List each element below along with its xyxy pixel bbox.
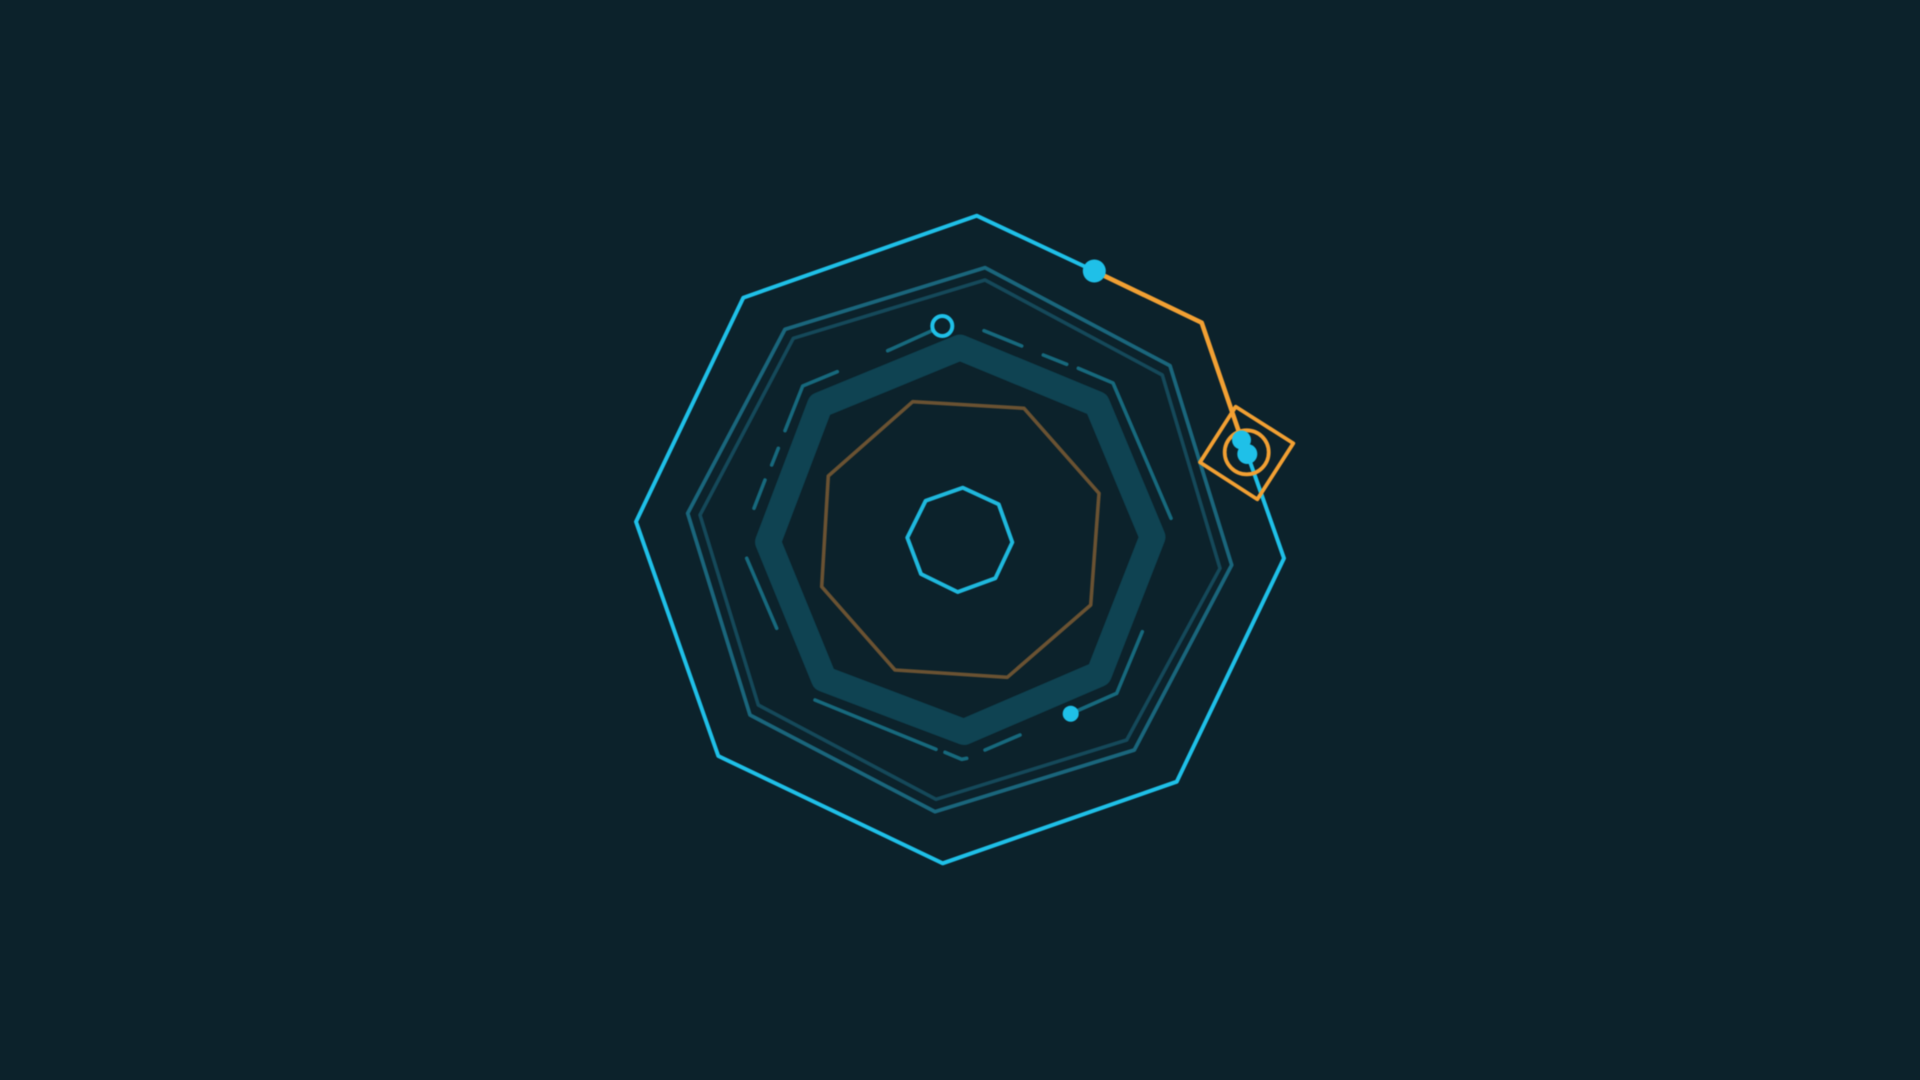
octagon: thick band xyxy=(768,348,1152,732)
octagon: third ring xyxy=(700,280,1220,799)
octagon: inner cyan ring xyxy=(907,488,1012,592)
orange diamond marker xyxy=(1200,407,1293,499)
octagon: second ring xyxy=(688,268,1232,812)
dot: lower right node xyxy=(1063,706,1079,722)
octagon: outer cyan ring xyxy=(636,216,1284,863)
dot: orange path end xyxy=(1232,430,1251,450)
octagon: brown ring xyxy=(822,402,1099,677)
orange highlighted path xyxy=(1094,271,1242,440)
dot: orange path start xyxy=(1083,260,1106,282)
dot: marker centre xyxy=(1237,444,1257,464)
orange circle marker xyxy=(1225,430,1269,474)
open circle node xyxy=(932,316,952,336)
dashed octagon ring xyxy=(747,326,1171,759)
